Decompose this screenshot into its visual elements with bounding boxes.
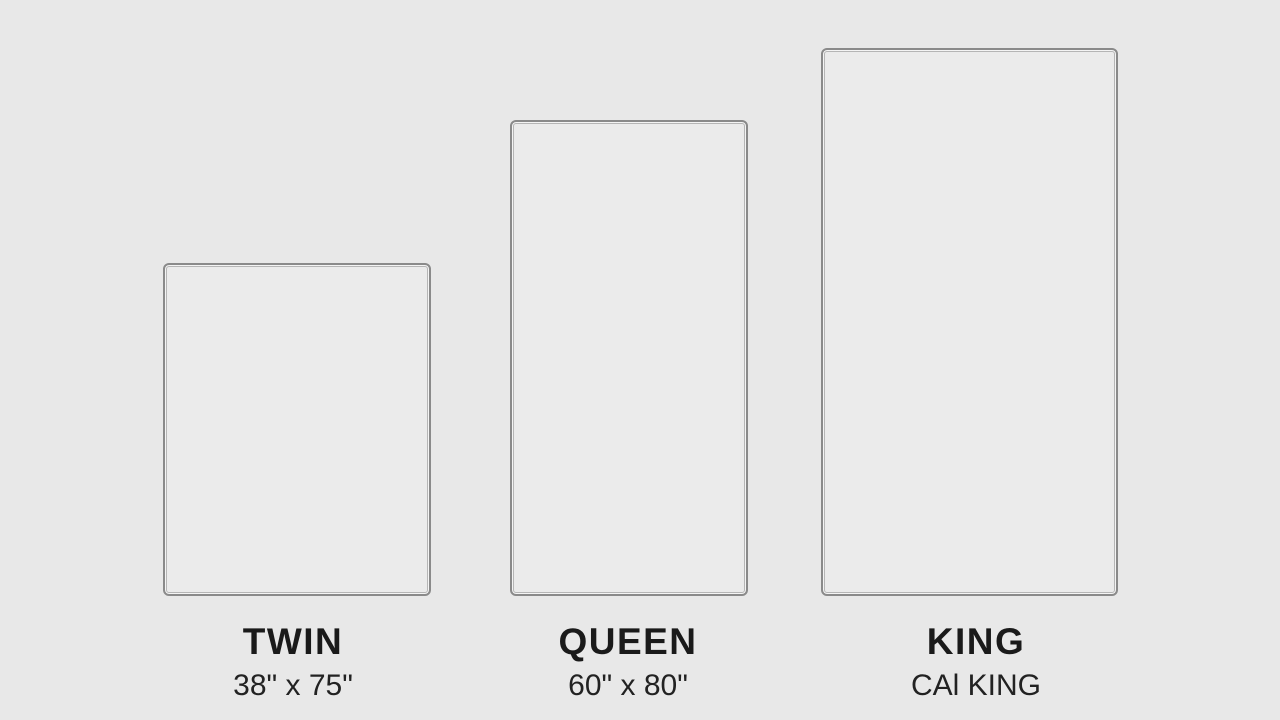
bed outline: queen [510,120,748,596]
bed outline: twin [163,263,431,596]
label: queen [558,621,698,702]
label: king [911,621,1041,702]
label: twin [233,621,353,702]
label: queen: 60" x 80" [568,669,688,702]
label: queen: QUEEN [558,621,698,662]
label: twin: TWIN [243,621,343,662]
label: king: CAl KING [911,669,1041,702]
label: king: KING [927,621,1025,662]
label: twin: 38" x 75" [233,669,353,702]
bed outline: king [821,48,1118,596]
